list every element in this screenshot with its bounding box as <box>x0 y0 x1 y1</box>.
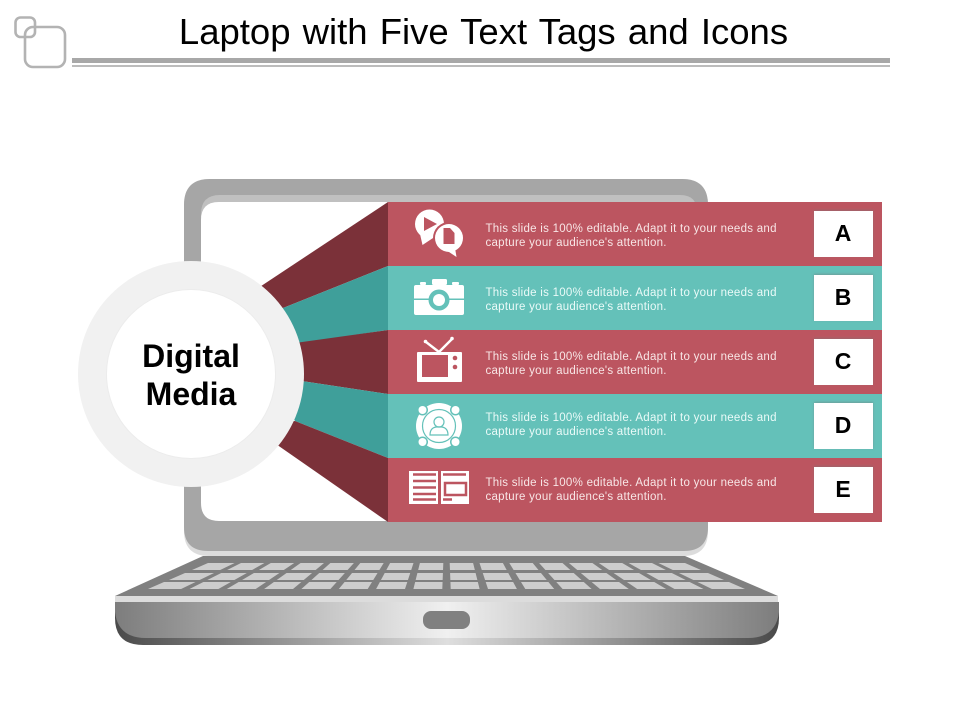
band B <box>388 266 882 330</box>
icon: media chat bubbles <box>415 210 465 257</box>
tag A <box>814 211 873 257</box>
icon: camera <box>414 279 464 315</box>
band E <box>388 458 882 522</box>
laptop lid <box>184 179 708 556</box>
tag A: A <box>835 220 851 246</box>
touchpad <box>423 611 470 629</box>
text B: capture your audience's attention. <box>486 301 666 313</box>
text A: capture your audience's attention. <box>486 237 666 249</box>
tag B: B <box>835 284 851 310</box>
central circle <box>78 261 304 487</box>
tag D <box>814 403 873 449</box>
tag C <box>814 339 873 385</box>
text B: This slide is 100% editable. Adapt it to your needs and <box>486 287 776 299</box>
keyboard deck <box>115 556 778 596</box>
text E: capture your audience's attention. <box>486 491 666 503</box>
circle label: Media <box>146 376 237 412</box>
tag B <box>814 275 873 321</box>
text D: This slide is 100% editable. Adapt it to your needs and <box>486 412 776 424</box>
band D <box>388 394 882 458</box>
icon: user in circle <box>416 403 462 449</box>
title: Laptop with Five Text Tags and Icons <box>179 11 788 52</box>
band A <box>388 202 882 266</box>
tag E <box>814 467 873 513</box>
text C: This slide is 100% editable. Adapt it to your needs and <box>486 351 776 363</box>
header icon: overlapping squares <box>16 18 65 67</box>
laptop base <box>115 596 779 645</box>
circle label: Digital <box>142 338 240 374</box>
laptop <box>115 179 779 645</box>
text C: capture your audience's attention. <box>486 365 666 377</box>
tag E: E <box>835 476 851 502</box>
tag C: C <box>835 348 851 374</box>
band C <box>388 330 882 394</box>
fan wedges <box>240 202 388 522</box>
icon: open book <box>409 471 469 504</box>
keys <box>148 563 745 589</box>
header rule <box>72 58 890 67</box>
icon: television <box>417 337 462 382</box>
text A: This slide is 100% editable. Adapt it to your needs and <box>486 223 776 235</box>
text D: capture your audience's attention. <box>486 426 666 438</box>
text E: This slide is 100% editable. Adapt it to your needs and <box>486 477 776 489</box>
tag D: D <box>835 412 851 438</box>
